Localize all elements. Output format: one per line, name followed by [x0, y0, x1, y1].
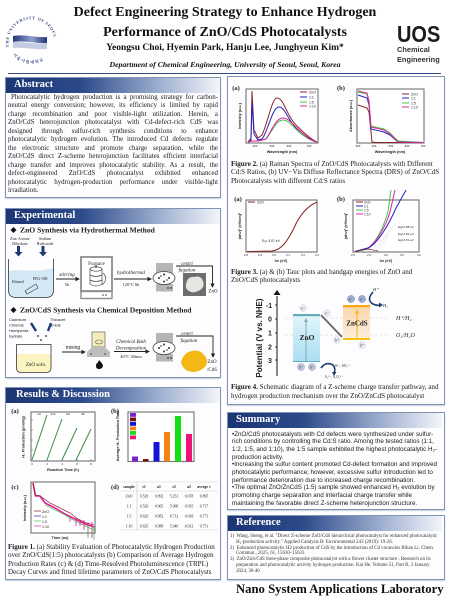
table (d): fitted lifetime parameters: ZnO: [126, 494, 133, 498]
chart 2a: Raman spectra: 1:5: [309, 100, 314, 104]
chart (c): TRPL decay curves: [11, 482, 95, 540]
chart 3b: Tauc plot ZnO/CdS: Eg=2.51 eV: [398, 238, 414, 242]
reaction arrows: H₂: [382, 303, 388, 308]
heading: abstract: [6, 78, 220, 93]
arrow: chemical bath decomposition: [114, 340, 149, 359]
chart 3b: Tauc plot ZnO/CdS: [337, 190, 421, 263]
caption: figure 2: Cd:S Ratios, (b) UV−Vis Diffuse Reflectance Spectra (DRS) of ZnO/CdS: [231, 168, 439, 176]
reagents: zinc acetate and sodium hydroxide: Sodium: [39, 237, 51, 241]
table (d): fitted lifetime parameters: 5.946: [170, 524, 178, 528]
table (d): fitted lifetime parameters: 5.251: [170, 494, 178, 498]
table (d): fitted lifetime parameters: 0.895: [200, 494, 208, 498]
chart 3a: Tauc plot ZnO: [234, 196, 319, 263]
chart 2a: Raman spectra: 600: [287, 144, 292, 148]
arrow: centrifugation to ZnO/CdS: centri: [181, 332, 193, 337]
reagents: zinc acetate and sodium hydroxide: Zinc Acetate: [10, 237, 30, 241]
labels: redox couples: H⁺/H₂: [395, 315, 412, 322]
product: ZnO/CdS powder: [181, 351, 217, 373]
reagents: cadmium chloride and thioacetamide: hydrate: [9, 334, 23, 338]
chart 2a: Raman spectra: 500: [270, 144, 275, 148]
figure charts and schematic: [232, 85, 426, 380]
title: [74, 5, 376, 40]
chart (a): stability evaluation: 4th: [81, 412, 85, 416]
charge carriers: e⁻: [325, 312, 329, 316]
chart (a): stability evaluation: (a): [11, 408, 19, 415]
arrow: stirring: 5h: [65, 282, 70, 287]
chart 3b: Tauc plot ZnO/CdS: ZnO: [364, 200, 371, 204]
chart 3a: Tauc plot ZnO: Eg= 3.07 eV: [262, 239, 281, 243]
text: summary bullets: production activity.: [232, 454, 283, 461]
charge carriers: h⁺: [335, 338, 339, 342]
chart 3b: Tauc plot ZnO/CdS: 2.0: [351, 253, 355, 257]
panel: experimental: [5, 208, 221, 378]
chart 3b: Tauc plot ZnO/CdS: 3.0: [384, 253, 388, 257]
title: Defect Engineering Strategy to Enhance Hydrogen: [74, 5, 376, 20]
arrow: chemical bath decomposition: 40°C 30min: [120, 354, 142, 359]
table (d): fitted lifetime parameters: 1:10: [126, 524, 132, 528]
text: abstract body: ZnO/CdS heterojunction photocatalyst with Cd-defect-rich CdS was: [8, 119, 218, 126]
diagram: synthesis schematic: [8, 226, 218, 373]
reagents: zinc acetate and sodium hydroxide: Hydroxide: [37, 242, 54, 246]
hot plate with flask and flame: [87, 332, 110, 369]
charge carriers: [298, 296, 366, 370]
logo: University of Seoul emblem: 서울시립대학교: [14, 54, 44, 64]
potential axis: 1: [268, 330, 272, 338]
chart (a): stability evaluation: 6: [76, 462, 78, 466]
logo: University of Seoul emblem: [6, 16, 56, 64]
caption: figure 3: [231, 268, 412, 284]
reagents: zinc acetate and sodium hydroxide: [10, 237, 54, 256]
title: Performance of ZnO/CdS Photocatalysts: [103, 24, 347, 40]
chart 3b: Tauc plot ZnO/CdS: 1:1: [364, 204, 369, 208]
reaction arrows: [321, 287, 388, 380]
table (d): fitted lifetime parameters: 0.529: [140, 494, 148, 498]
chart 2b: UV-Vis DRS: 700: [421, 144, 426, 148]
text: summary bullets: •Increasing the sulfur content promoted Cd-defect formation and improved: [232, 461, 437, 468]
potential axis: Potential (V vs. NHE): [255, 298, 264, 378]
heading: results and discussion: [6, 388, 220, 403]
charge carriers: h⁺: [299, 366, 303, 370]
chart 3b: Tauc plot ZnO/CdS: Eg=2.81 eV: [398, 232, 414, 236]
chart 2b: UV-Vis DRS: 500: [389, 144, 394, 148]
chart 2a: Raman spectra: 400: [253, 144, 258, 148]
potential axis: 0: [268, 316, 272, 324]
panel: reference: [227, 515, 445, 580]
centrifuge 1: [153, 263, 175, 292]
arrow: hydrothermal: hydrothermal: [117, 270, 146, 276]
text: summary bullets: rich conditions by controlling the Cd:S ratio. Among the tested ratios (1:1,: [232, 438, 434, 445]
table (d): fitted lifetime parameters: 0.526: [140, 504, 148, 508]
table (d): fitted lifetime parameters: τ2: [172, 485, 176, 489]
text: summary bullets: •The optimal ZnO/ZnCdS (1:5) sample showed enhanced H₂ evolution by: [232, 484, 435, 491]
chart (c): TRPL decay curves: (c): [11, 484, 19, 491]
heading: results and discussion: Results & Discussion: [16, 389, 110, 400]
chart 2b: UV-Vis DRS: 600: [405, 144, 410, 148]
chart 3b: Tauc plot ZnO/CdS: 3.5: [400, 253, 404, 257]
reagents: zinc acetate and sodium hydroxide: Dihydrate: [12, 242, 28, 246]
text: abstract body: defect-engineered ZnO/CdS photocatalyst exhibited enhanced: [8, 170, 218, 177]
text: abstract body: ZnO/CdS direct Z-scheme heterojunction facilitates efficient interfacial: [8, 153, 218, 160]
affiliation: Department of Chemical Engineering, University of Seoul, Seoul, Korea: [109, 60, 340, 69]
chart 2b: UV-Vis DRS: Wavelength (nm): [375, 150, 406, 154]
table (d): fitted lifetime parameters: sample: [123, 485, 135, 489]
charge carriers: h⁺: [360, 344, 364, 348]
text: reference list: 2) Enhanced photocatalytic H2 production of CdS by the introduction of Cd vacancies Bihan Li. Chem.: [230, 546, 434, 551]
table (d): fitted lifetime parameters: 0.982: [155, 514, 163, 518]
logo: UOS Chemical Engineering: UOS: [397, 21, 440, 47]
text: reference list: Commun., 2025, 61, 15630–15633: [236, 551, 304, 556]
chart (a): stability evaluation: 4: [61, 462, 63, 466]
panel: figures 2 to 4: [227, 76, 445, 405]
product: ZnO powder: ZnO: [208, 290, 218, 294]
chart 3b: Tauc plot ZnO/CdS: (αhν)² (eV/cm)²: [344, 212, 348, 239]
caption: figure 2: Photocatalysts with different Cd:S ratios: [231, 177, 345, 185]
text: summary bullets: photocatalytic performance; however, excessive sulfur introduction led to: [232, 469, 433, 476]
chart (a): stability evaluation: 8: [90, 462, 92, 466]
caption: figure 1: Decay Curves and fitted lifetime parameters of ZnO/CdS Photocatalysts: [8, 568, 212, 576]
chart 3b: Tauc plot ZnO/CdS: 2.5: [367, 253, 371, 257]
caption: figure 4: [231, 383, 438, 400]
arrow: centrifugation to ZnO: fugation: [179, 268, 196, 274]
beaker: ethanol and PEG-300: Ethanol: [12, 280, 24, 284]
chart 2b: UV-Vis DRS: Absorbance (a.u.): [349, 99, 353, 132]
caption: figure 4: hydrogen production mechanism over the ZnO/ZnCdS photocatalyst: [231, 392, 424, 400]
reagents: cadmium chloride and thioacetamide: Hemipenta: [9, 328, 29, 333]
arrow: chemical bath decomposition: Decomposition: [115, 346, 147, 352]
text: abstract body: photocatalytic hydrogen-production performance under visible-light: [8, 179, 218, 186]
table (d): fitted lifetime parameters: 1:1: [127, 504, 132, 508]
reaction arrows: H⁺: [372, 287, 379, 292]
text: reference list: H₂-production activity." Applied Catalysis B: Environmental 243 (2019): 19-26.: [236, 540, 393, 545]
caption: figure 4: Figure 4. Schematic diagram of a Z-scheme charge transfer pathway, and: [231, 383, 438, 391]
text: abstract body: photocatalytic hydrogen evolution. The introduced Cd defects regulate: [8, 136, 218, 143]
ZnCdS band: ZnCdS: [346, 320, 368, 328]
caption: figure 3: Figure 3. (a) & (b) Tauc plots and bandgap energies of ZnO and: [231, 268, 412, 276]
charge carriers: e⁻: [349, 298, 353, 302]
chart 2a: Raman spectra: 700: [307, 144, 312, 148]
panel: abstract: [5, 77, 221, 198]
text: abstract body: charge transfer and improves photocatalytic stability. As a result, the: [8, 162, 218, 169]
chart 2b: UV-Vis DRS: 1:5: [411, 102, 416, 106]
reagents: cadmium chloride and thioacetamide: Chloride: [9, 322, 25, 328]
chart (a): stability evaluation: 0: [31, 462, 33, 466]
chart 3b: Tauc plot ZnO/CdS: 4.0: [417, 253, 421, 257]
furnace: Furnace: [88, 261, 106, 267]
reagents: cadmium chloride and thioacetamide: [9, 317, 66, 341]
chart 3a: Tauc plot ZnO: 3.1: [286, 253, 290, 257]
table (d): fitted lifetime parameters: 0.717: [200, 504, 208, 508]
text: summary bullets: promoting charge separation and interfacial charge transfer while: [232, 492, 412, 499]
heading: experimental: [6, 209, 220, 224]
chart 3b: Tauc plot ZnO/CdS: (b): [337, 196, 345, 203]
ZnCdS band: [343, 305, 370, 340]
caption: figure 1: over ZnO/CdS(1:5) photocatalysts (b) Comparison of Average Hydrogen: [8, 551, 214, 559]
text: summary bullets: 1:2, 1:5, and 1:10), the 1:5 sample exhibited the highest photocatalytic H₂-: [232, 446, 437, 453]
chart (a): stability evaluation: H₂ Production (μmol/g): [22, 415, 26, 458]
table (d): fitted lifetime parameters: 5.968: [170, 504, 178, 508]
chart (c): TRPL decay curves: 1:1: [42, 515, 47, 519]
chart (b): average hydrogen production bars: (b): [111, 408, 119, 415]
chart 3a: Tauc plot ZnO: 3.2: [301, 253, 305, 257]
arrow: hydrothermal: [114, 270, 151, 287]
heading: experimental: Experimental: [14, 210, 75, 221]
chart (b): average hydrogen production bars: [111, 408, 194, 462]
arrow: centrifugation to ZnO/CdS: [176, 332, 213, 357]
table (d): fitted lifetime parameters: a2: [187, 485, 191, 489]
chart 3a: Tauc plot ZnO: 3.3: [315, 253, 319, 257]
product: ZnO/CdS powder: ZnO: [207, 360, 217, 365]
potential axis: [255, 290, 280, 378]
arrow: mixing: [62, 345, 85, 352]
beaker: ZnO solution: ZnO soln.: [26, 362, 46, 368]
text: abstract body: Photocatalytic hydrogen production is a promising strategy for carbon-: [11, 94, 218, 101]
chart (a): stability evaluation: 2: [46, 462, 48, 466]
chart (b): average hydrogen production bars: Average H₂ Production Rate: [116, 411, 120, 461]
text: reference list: 2024, 30-40: [236, 569, 260, 574]
chart 3b: Tauc plot ZnO/CdS: Eg=2.88 eV: [398, 225, 414, 229]
heading: reference: [228, 516, 442, 531]
logo: UOS Chemical Engineering: [397, 21, 440, 64]
text: abstract body: charge recombination and poor visible-light utilization. Herein, a: [8, 111, 218, 118]
potential axis: 3: [268, 358, 272, 365]
potential axis: -1: [266, 303, 272, 310]
arrow: stirring: stirring: [59, 272, 75, 278]
figure 1 charts: [11, 408, 218, 540]
caption: figure 2: [231, 160, 439, 185]
chart (c): TRPL decay curves: 1:10: [42, 525, 49, 529]
ZnO method heading: ZnO Synthesis via Hydrothermal Method: [20, 226, 156, 234]
table (d): fitted lifetime parameters: 0.012: [185, 524, 193, 528]
ZnO/CdS method heading: ZnO/CdS Synthesis via Chemical Deposition Method: [20, 306, 192, 314]
text: reference list: [230, 533, 438, 574]
footer: laboratory name: Nano System Applications Laboratory: [236, 582, 444, 596]
reaction arrows: S²⁻, SO₃²⁻: [335, 364, 351, 369]
chart 3a: Tauc plot ZnO: (a): [234, 196, 242, 203]
chart (a): stability evaluation: 2nd: [51, 412, 56, 416]
chart 3b: Tauc plot ZnO/CdS: 1:10: [364, 212, 371, 216]
charge transfer band: [321, 315, 342, 337]
arrow: centrifugation to ZnO: centri: [181, 262, 193, 267]
table (d): fitted lifetime parameters: 0.988: [155, 524, 163, 528]
centrifuge 2: [153, 333, 175, 362]
panel: summary: [227, 412, 445, 510]
chart 3a: Tauc plot ZnO: 2.8: [244, 253, 248, 257]
table (d): fitted lifetime parameters: averge τ: [197, 485, 211, 489]
chart 2b: UV-Vis DRS: 300: [356, 144, 361, 148]
chart 2b: UV-Vis DRS: 400: [372, 144, 377, 148]
arrow: centrifugation to ZnO/CdS: fugation: [181, 339, 198, 344]
chart 2b: UV-Vis DRS: ZnO: [411, 92, 418, 96]
table (d): fitted lifetime parameters: a1: [157, 485, 161, 489]
logo: UOS Chemical Engineering: Chemical: [397, 45, 430, 54]
heading: summary: [228, 413, 442, 428]
chart 3a: Tauc plot ZnO: 2.9: [258, 253, 262, 257]
beaker: ethanol and PEG-300: PEG-300: [33, 277, 48, 281]
reagents: cadmium chloride and thioacetamide: Cadmium: [9, 317, 27, 322]
arrow: hydrothermal: 120°C 6h: [123, 282, 140, 287]
chart 2a: Raman spectra: Wavelength (nm): [267, 150, 298, 154]
chart 2a: Raman spectra: 1:1: [309, 96, 314, 100]
table (d): fitted lifetime parameters: [111, 482, 218, 530]
reaction arrows: S₂²⁻, S₂O₃²⁻: [325, 375, 343, 380]
arrow: chemical bath decomposition: Chemical Bath: [116, 340, 146, 345]
chart 2a: Raman spectra: 1:10: [309, 104, 316, 108]
table (d): fitted lifetime parameters: 0.965: [155, 504, 163, 508]
chart 3a: Tauc plot ZnO: ZnO: [257, 200, 264, 204]
chart 2b: UV-Vis DRS: (b): [337, 85, 345, 92]
caption: figure 1: Production Rates (c) & (d) Time-Resolved Photoluminescence (TRPL): [8, 560, 208, 568]
ZnO band: [293, 314, 320, 362]
table (d): fitted lifetime parameters: τ1: [142, 485, 146, 489]
table (d): fitted lifetime parameters: 0.751: [200, 524, 208, 528]
chart (a): stability evaluation: Reaction Time (h): [47, 468, 80, 472]
text: reference list: 3) ZnO/ZnS/CdS three-phase composite photocatalyst with a flower cluster structure : Research on its: [230, 557, 431, 562]
chart 3a: Tauc plot ZnO: 3.0: [272, 253, 276, 257]
chart 2a: Raman spectra: Intensity (a.u.): [238, 102, 242, 129]
text: reference list: preparation and photocatalytic activity hydrogen production. Kai He. Volume 51, Part B, 2 January: [236, 563, 430, 568]
authors: Yeongsu Choi, Hyemin Park, Hanju Lee, Junghyeun Kim*: [106, 43, 344, 53]
table (d): fitted lifetime parameters: 0.035: [185, 504, 193, 508]
header divider: [8, 73, 441, 74]
text: summary bullets: maintaining the favorable direct Z-scheme heterojunction structure.: [232, 500, 417, 507]
panel: results and discussion: [5, 387, 221, 580]
labels: redox couples: [395, 315, 416, 339]
table (d): fitted lifetime parameters: 8.712: [170, 514, 178, 518]
arrow: centrifugation to ZnO: [176, 262, 212, 287]
text: abstract body: designed through sulfur-rich synthesis conditions to enhance: [8, 128, 218, 135]
arrow: stirring: [56, 272, 79, 287]
chart (a): stability evaluation: 1st: [37, 412, 41, 416]
text: abstract body: irradiation.: [8, 187, 38, 194]
text: summary bullets: [232, 430, 437, 507]
text: summary bullets: performance deterioration due to increased charge recombination.: [232, 477, 415, 484]
chart 2a: Raman spectra: (a): [232, 85, 240, 92]
table (d): fitted lifetime parameters: 1:5: [127, 514, 132, 518]
charge carriers: e⁻: [301, 306, 305, 310]
chart 2b: UV-Vis DRS: 1:1: [411, 96, 416, 100]
table (d): fitted lifetime parameters: 0.771: [200, 514, 208, 518]
table (d): fitted lifetime parameters: (d): [111, 484, 119, 491]
ZnO band: ZnO: [299, 333, 315, 342]
text: abstract body: [8, 94, 218, 194]
furnace: [81, 257, 112, 298]
text: abstract body: the electronic structure and promote charge separation, while the: [8, 145, 218, 152]
caption: figure 2: Figure 2. (a) Raman Spectra of ZnO/CdS Photocatalysts with Different: [231, 160, 433, 168]
heading: abstract: Abstract: [14, 79, 53, 90]
chart (c): TRPL decay curves: Intensity (a.u.): [23, 494, 27, 521]
charge carriers: e⁻: [360, 298, 364, 302]
product: ZnO/CdS powder: /CdS: [207, 368, 217, 373]
chart 2b: UV-Vis DRS: [337, 85, 426, 154]
logo: UOS Chemical Engineering: Engineering: [397, 55, 440, 64]
text: abstract body: neutral energy conversion; however, its efficiency is limited by rapid: [8, 102, 218, 109]
heading: reference: Reference: [236, 517, 281, 528]
table (d): fitted lifetime parameters: 0.635: [140, 524, 148, 528]
chart 2b: UV-Vis DRS: 1:10: [411, 106, 418, 110]
potential axis: 2: [268, 344, 272, 352]
chart 3b: Tauc plot ZnO/CdS: hν (eV): [380, 259, 393, 263]
logo: University of Seoul emblem: THE UNIVERSITY OF SEOUL: [6, 16, 56, 48]
chart (a): stability evaluation: [11, 408, 95, 472]
reagents: cadmium chloride and thioacetamide: Thioacet: [50, 317, 66, 322]
text: reference list: 1) Wang, Sheng, et al. "Direct Z-scheme ZnO/CdS hierarchical photocatalyst for enhanced photocatalytic: [230, 534, 437, 539]
chart (c): TRPL decay curves: Time (ns): [52, 536, 69, 540]
text: summary bullets: •ZnO/CdS photocatalysts with Cd defects were synthesized under sulfur-: [232, 430, 433, 438]
table (d): fitted lifetime parameters: 0.992: [155, 494, 163, 498]
product: ZnO powder: [183, 273, 218, 296]
charge carriers: h⁺: [310, 366, 314, 370]
table (d): fitted lifetime parameters: 0.629: [140, 514, 148, 518]
arrow: mixing: mixing: [66, 345, 80, 351]
figure 4: Z-scheme schematic: [255, 287, 416, 380]
caption: figure 3: ZnO/CdS photocatalysts: [231, 276, 300, 284]
table (d): fitted lifetime parameters: 0.078: [185, 494, 193, 498]
chart 3b: Tauc plot ZnO/CdS: 1:5: [364, 208, 369, 212]
caption: figure 1: [8, 543, 215, 576]
chart 2a: Raman spectra: ZnO: [309, 90, 316, 94]
beaker: ZnO solution: [16, 344, 51, 372]
chart 3a: Tauc plot ZnO: (αhν)² (eV/cm)²: [238, 212, 242, 239]
caption: figure 1: Figure 1. (a) Stability Evaluation of Photocatalytic Hydrogen Production: [8, 543, 215, 551]
reagents: cadmium chloride and thioacetamide: amide: [50, 322, 62, 328]
beaker: ethanol and PEG-300: [8, 259, 54, 298]
chart (c): TRPL decay curves: 1:5: [42, 520, 47, 524]
chart 2a: Raman spectra: [232, 85, 318, 154]
heading: summary: Summary: [236, 414, 280, 425]
chart (a): stability evaluation: 3rd: [66, 412, 70, 416]
chart 3a: Tauc plot ZnO: hν (eV): [275, 259, 288, 263]
chart (c): TRPL decay curves: ZnO: [42, 510, 49, 514]
table (d): fitted lifetime parameters: 0.018: [185, 514, 193, 518]
labels: redox couples: O₂/H₂O: [396, 333, 416, 339]
